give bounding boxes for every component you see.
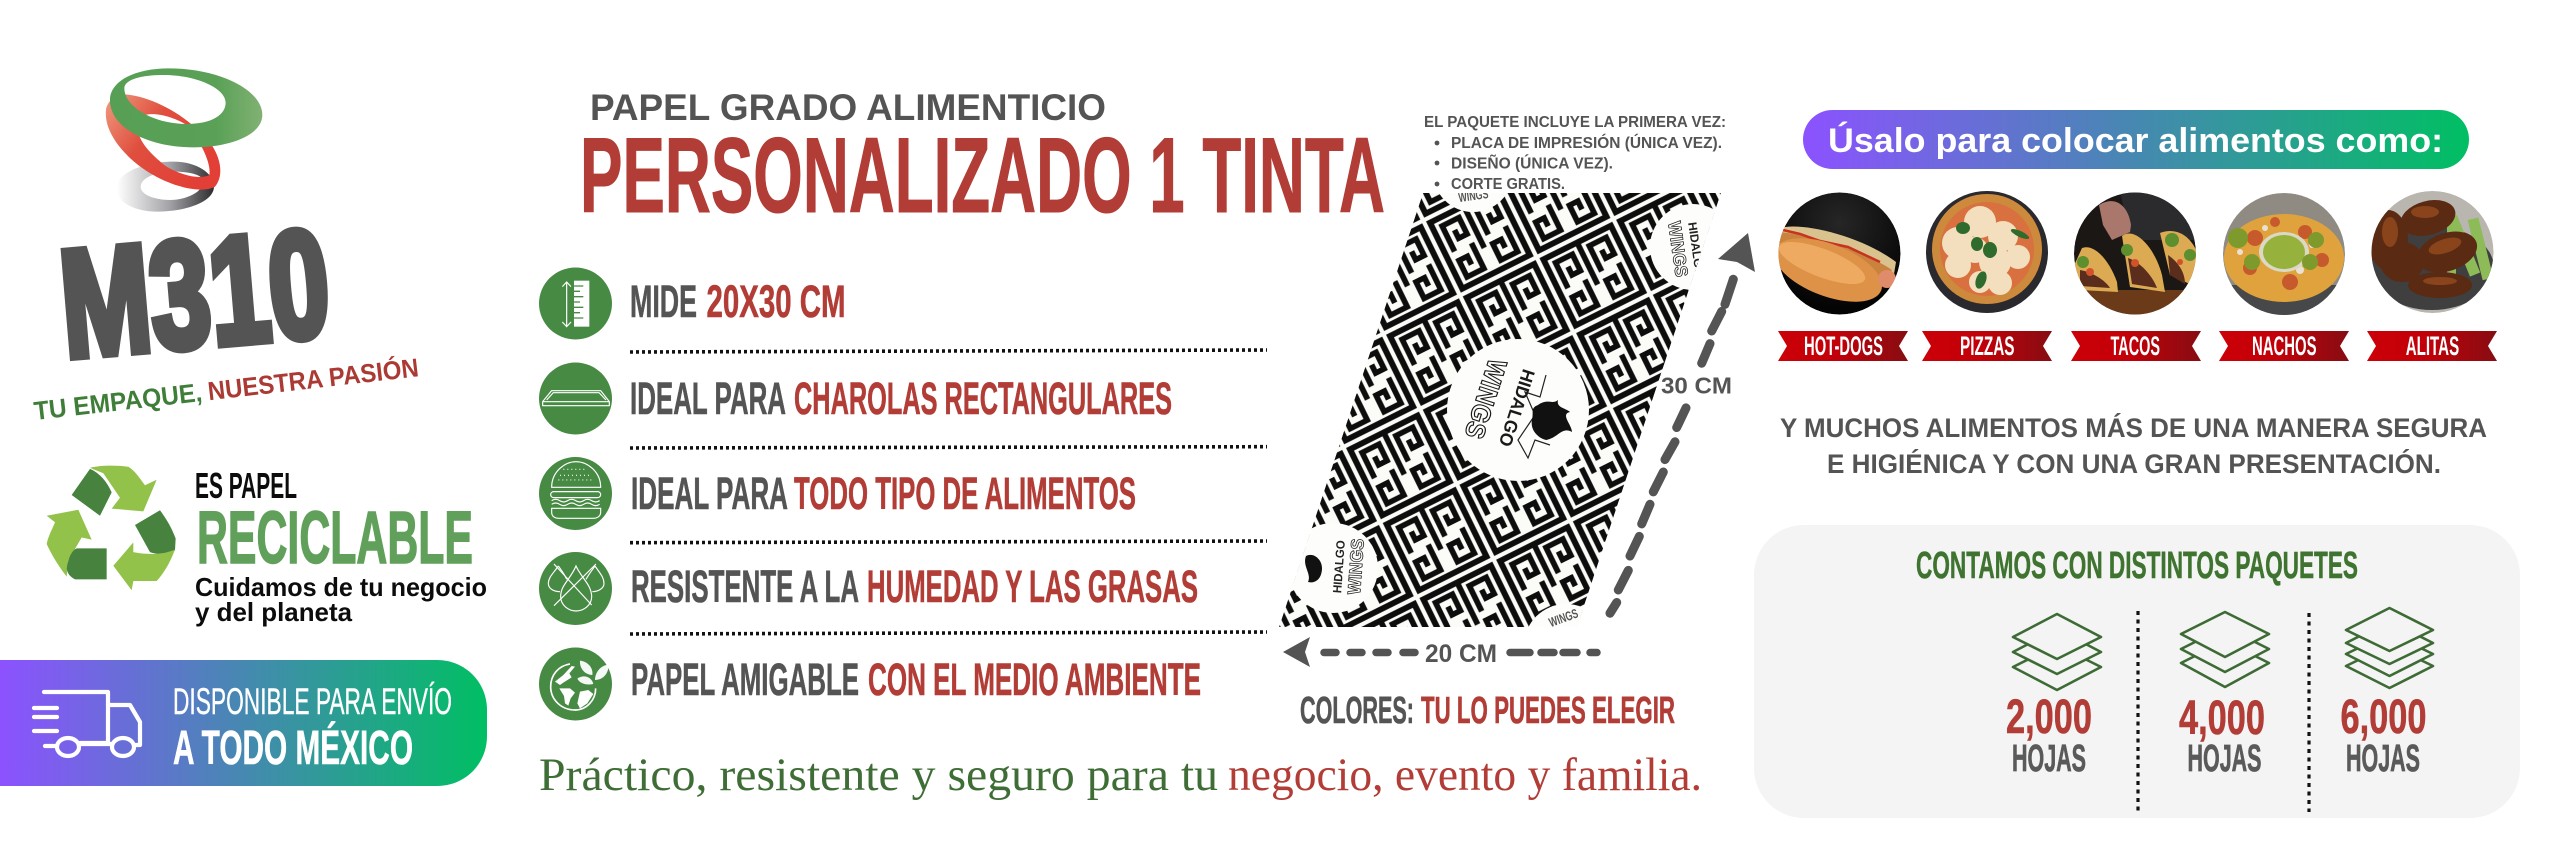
arrow head (1718, 233, 1755, 272)
food item: tacos photo (2074, 192, 2196, 314)
ribbon: hot-dogs (1778, 331, 1908, 361)
slogan (539, 749, 1702, 801)
icon: stack of sheets (2346, 608, 2433, 688)
unit label: HOJAS (2188, 738, 2262, 780)
environment text red: CON EL MEDIO AMBIENTE (868, 654, 1201, 705)
brand seal top: WINGS (1457, 186, 1489, 205)
note item three: CORTE GRATIS. (1451, 176, 1565, 193)
icon: ruler (539, 268, 612, 340)
brand seal bottom (1528, 604, 1583, 627)
banner background (0, 660, 487, 786)
brand seal top (1440, 193, 1505, 212)
brand seal upper right (1650, 204, 1714, 290)
icon: drops crossed (539, 552, 612, 625)
pill background (1803, 110, 2469, 169)
brand seal lower left: WINGS (1344, 538, 1368, 595)
ribbon: alitas (2367, 331, 2497, 361)
ribbon: nachos (2219, 331, 2349, 361)
package: 2000 sheets (2006, 614, 2101, 780)
feature list (539, 268, 1267, 720)
ribbon: alitas: ALITAS (2406, 331, 2459, 361)
pill text: Úsalo para colocar alimentos como: (1828, 122, 2443, 160)
colours label red: TU LO PUEDES ELEGIR (1421, 690, 1675, 732)
trays text red: CHAROLAS RECTANGULARES (794, 373, 1172, 424)
size text red: 20X30 CM (706, 276, 846, 327)
icon: burger (539, 457, 612, 530)
colours label grey: COLORES: (1300, 690, 1414, 732)
feature: environment (539, 648, 1201, 720)
unit label: HOJAS (2346, 738, 2420, 780)
brand seal centre: WINGS (1459, 355, 1512, 442)
ribbon: hot-dogs: HOT-DOGS (1804, 331, 1883, 361)
quantity 4000: 4,000 (2179, 692, 2265, 745)
colours note (1300, 690, 1675, 732)
banner: shipping (0, 660, 487, 786)
icon: globe with leaves (539, 648, 612, 720)
logo wordmark M310: M310 (54, 198, 335, 390)
note item one: PLACA DE IMPRESIÓN (ÚNICA VEZ). (1451, 133, 1722, 152)
arrow: 30 cm (1610, 233, 1755, 613)
panel background (1754, 525, 2520, 818)
feature: size (539, 268, 846, 340)
swirl gray ring (117, 162, 214, 212)
meander pattern (1279, 193, 1721, 627)
ribbon: tacos (2071, 331, 2201, 361)
arrow: 20 cm (1283, 637, 1597, 668)
food item: nachos photo (2223, 193, 2345, 315)
printed paper sample (1279, 193, 1721, 627)
brand seal lower left: HIDALGO (1330, 540, 1348, 594)
recyclable subtitle line two: y del planeta (195, 597, 353, 627)
unit label: HOJAS (2012, 738, 2086, 780)
arrow head (1283, 637, 1310, 667)
banner line two: A TODO MÉXICO (173, 721, 413, 775)
subtitle: PAPEL GRADO ALIMENTICIO (590, 87, 1106, 128)
brand seal centre: HIDALGO (1495, 367, 1539, 449)
tagline green part: TU EMPAQUE, (32, 377, 204, 426)
moisture text grey: RESISTENTE A LA (631, 561, 859, 612)
size text grey: MIDE (630, 276, 697, 327)
icon: stack of sheets (2181, 612, 2269, 687)
moisture text red: HUMEDAD Y LAS GRASAS (867, 561, 1198, 612)
package: 4000 sheets (2179, 612, 2269, 780)
brand seal bottom: WINGS (1547, 606, 1580, 630)
20 cm label: 20 CM (1425, 640, 1497, 668)
tagline red part: NUESTRA PASIÓN (206, 352, 420, 406)
slogan green: Práctico, resistente y seguro para tu (539, 749, 1218, 801)
dashed shaft (1324, 649, 1597, 656)
trays text grey: IDEAL PARA (630, 373, 786, 424)
food text grey: IDEAL PARA (631, 468, 788, 519)
paragraph (1780, 413, 2487, 479)
ribbon: nachos: NACHOS (2252, 331, 2316, 361)
paragraph line two: E HIGIÉNICA Y CON UNA GRAN PRESENTACIÓN. (1827, 449, 2441, 479)
panel: packages (1754, 525, 2520, 818)
ribbon: pizzas (1922, 331, 2052, 361)
heading pill: food use (1803, 110, 2469, 169)
note heading: EL PAQUETE INCLUYE LA PRIMERA VEZ: (1424, 114, 1726, 131)
recyclable text block (195, 465, 487, 627)
swirl red ring (106, 94, 220, 190)
ribbon: tacos: TACOS (2110, 331, 2160, 361)
feature: trays (539, 362, 1172, 434)
ribbon: pizzas: PIZZAS (1960, 331, 2014, 361)
swirl green ring (110, 68, 262, 147)
icon: truck (34, 692, 140, 756)
food item: pizza photo (1926, 191, 2048, 313)
reciclable heading: RECICLABLE (197, 496, 473, 579)
brand seal upper right: HIDALGO (1685, 221, 1707, 278)
slogan red: negocio, evento y familia. (1228, 749, 1702, 801)
feature: moisture (539, 552, 1198, 625)
brand seal upper right: WINGS (1664, 220, 1692, 278)
brand seal lower left (1288, 523, 1378, 613)
food item: wings photo (2368, 191, 2494, 313)
note item two: DISEÑO (ÚNICA VEZ). (1451, 152, 1613, 172)
icon: recycle (47, 466, 176, 590)
30 cm label: 30 CM (1661, 372, 1732, 398)
quantity 6000: 6,000 (2340, 691, 2426, 744)
es papel label: ES PAPEL (195, 465, 297, 506)
food text red: TODO TIPO DE ALIMENTOS (794, 468, 1136, 519)
environment text grey: PAPEL AMIGABLE (631, 654, 859, 705)
tagline (32, 352, 420, 426)
brand seal centre (1447, 339, 1589, 481)
icon: tray (539, 362, 612, 434)
package: 6000 sheets (2340, 608, 2433, 780)
quantity 2000: 2,000 (2006, 691, 2092, 744)
recyclable subtitle line one: Cuidamos de tu negocio (195, 572, 487, 602)
logo: swirl mark (106, 68, 262, 212)
feature: food (539, 457, 1136, 530)
dashed shaft (1610, 279, 1733, 613)
food item: hot dog photo (1765, 192, 1900, 315)
title: PERSONALIZADO 1 TINTA (580, 115, 1385, 235)
icon: stack of sheets (2013, 614, 2101, 690)
package includes note (1424, 114, 1726, 193)
banner line one: DISPONIBLE PARA ENVÍO (173, 681, 452, 722)
paragraph line one: Y MUCHOS ALIMENTOS MÁS DE UNA MANERA SEGURA (1780, 413, 2487, 443)
